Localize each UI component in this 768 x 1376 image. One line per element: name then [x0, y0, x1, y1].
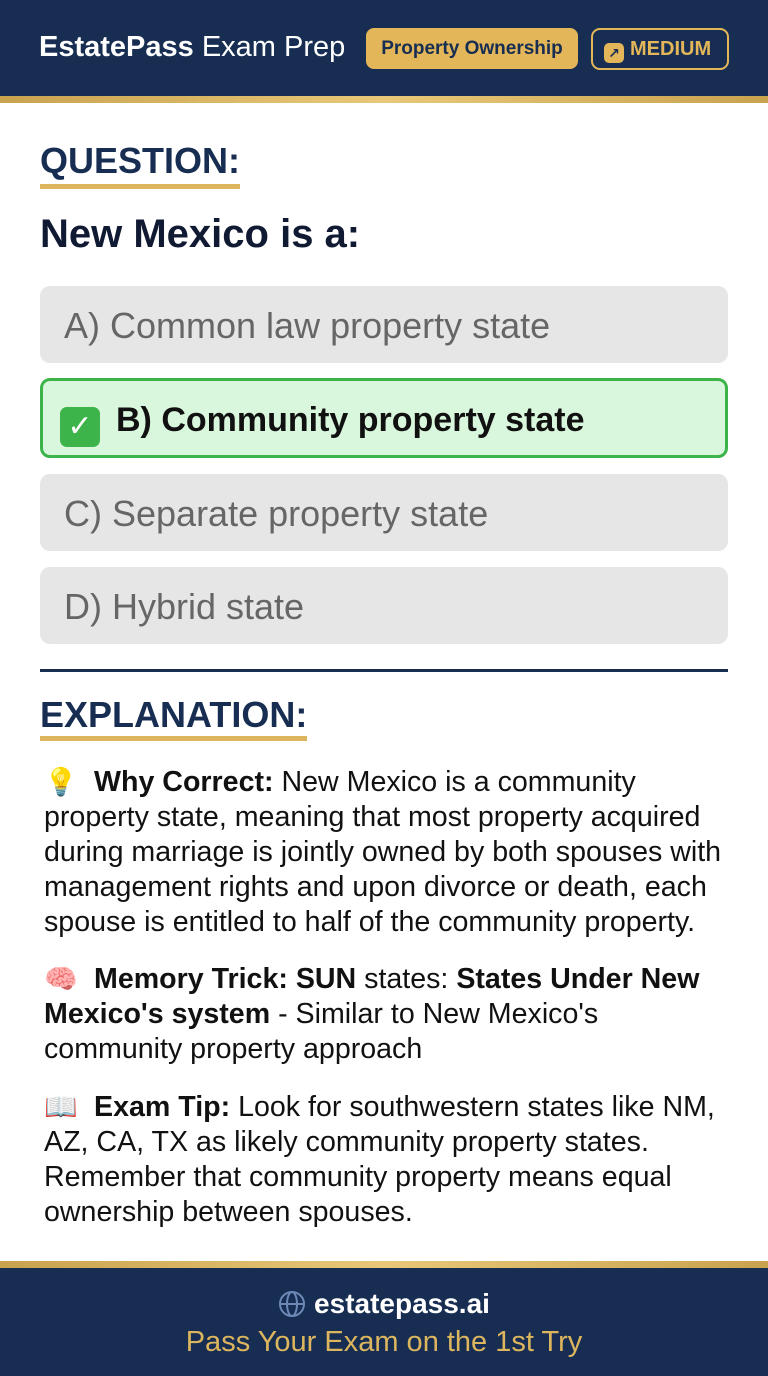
why correct: during marriage is jointly owned by both spouses with	[44, 836, 721, 868]
option A	[40, 286, 728, 363]
difficulty badge	[591, 28, 729, 70]
exam tip: ownership between spouses.	[44, 1196, 413, 1228]
option A: A) Common law property state	[64, 305, 550, 346]
exam tip: AZ, CA, TX as likely community property states.	[44, 1126, 649, 1158]
option D: D) Hybrid state	[64, 586, 304, 627]
why correct: management rights and upon divorce or death, each	[44, 871, 707, 903]
exam tip: 📖	[44, 1092, 78, 1122]
memory trick: Mexico's system - Similar to New Mexico's	[44, 998, 598, 1030]
why correct: Why Correct: New Mexico is a community	[94, 766, 636, 798]
why correct: 💡	[44, 767, 78, 797]
why correct: property state, meaning that most property acquired	[44, 801, 700, 833]
option B correct: ✓	[67, 410, 93, 443]
option B correct	[40, 378, 728, 458]
option C	[40, 474, 728, 551]
memory trick	[44, 963, 700, 1065]
footer website: estatepass.ai	[314, 1288, 490, 1319]
question heading: QUESTION:	[40, 140, 240, 181]
difficulty badge: MEDIUM	[630, 38, 711, 60]
category badge: Property Ownership	[381, 38, 563, 59]
memory trick: 🧠	[44, 964, 78, 994]
exam tip: Exam Tip: Look for southwestern states like NM,	[94, 1091, 715, 1123]
why correct	[44, 766, 721, 938]
question text: New Mexico is a:	[40, 212, 360, 256]
option C: C) Separate property state	[64, 493, 488, 534]
category badge	[366, 28, 578, 69]
header bar	[0, 0, 768, 97]
memory trick: Memory Trick: SUN states: States Under New	[94, 963, 699, 995]
difficulty badge: ↗	[608, 45, 620, 61]
why correct: spouse is entitled to half of the community property.	[44, 906, 695, 938]
explanation heading: EXPLANATION:	[40, 694, 307, 735]
brand title: EstatePass Exam Prep	[39, 31, 345, 63]
option B correct: B) Community property state	[116, 401, 584, 439]
footer	[0, 1268, 768, 1376]
memory trick: community property approach	[44, 1033, 422, 1065]
option D	[40, 567, 728, 644]
exam tip: Remember that community property means equal	[44, 1161, 672, 1193]
footer tagline: Pass Your Exam on the 1st Try	[186, 1326, 582, 1358]
exam tip	[44, 1091, 715, 1228]
